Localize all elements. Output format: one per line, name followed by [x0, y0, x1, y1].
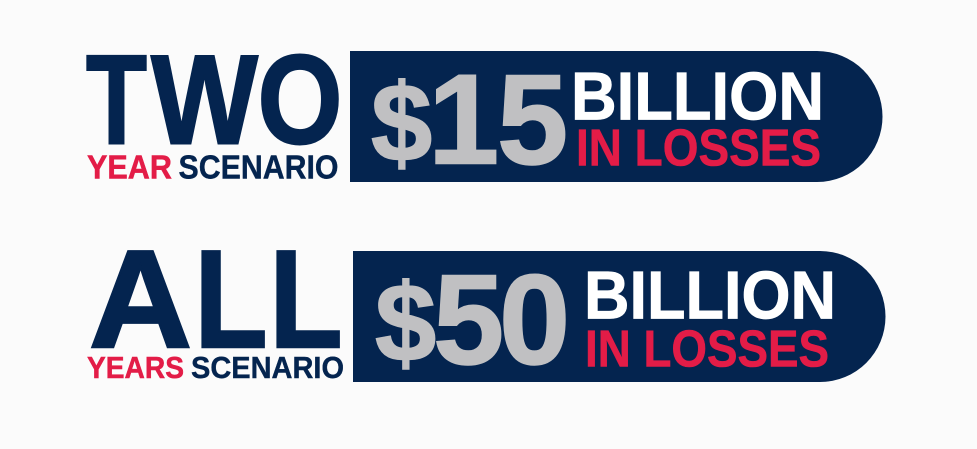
label: YEARS: YEARS: [87, 350, 184, 385]
panel: two year losses: [350, 51, 882, 182]
text: BILLION: BILLION: [571, 58, 824, 134]
amount: $15: [371, 48, 568, 192]
amount: $50: 5: [433, 249, 504, 392]
heading: ALL: A: [89, 222, 192, 377]
scenario row: all years: [87, 222, 886, 392]
panel: all years losses: [353, 251, 886, 382]
amount: $15: 1: [428, 48, 499, 192]
label: YEAR: YEAR: [87, 148, 172, 186]
scenario row: two year: [86, 28, 882, 192]
amount: $50: 0: [499, 249, 570, 392]
heading: TWO: T: [86, 28, 147, 170]
label: SCENARIO: SCENARIO: [191, 350, 344, 385]
amount: $50: [375, 249, 570, 392]
amount: $15: $: [371, 62, 432, 185]
text: BILLION: BILLION: [584, 258, 836, 334]
heading: ALL: [89, 222, 342, 377]
text: IN LOSSES: IN LOSSES: [585, 320, 829, 378]
heading: TWO: O: [258, 28, 342, 170]
amount: $50: $: [375, 262, 436, 385]
text: IN LOSSES: IN LOSSES: [576, 120, 821, 178]
amount: $15: 5: [497, 49, 568, 192]
heading: TWO: W: [151, 28, 258, 170]
heading: TWO: [86, 28, 342, 170]
heading: ALL: L: [194, 222, 268, 377]
label: SCENARIO: SCENARIO: [178, 148, 338, 186]
heading: ALL: L: [270, 222, 342, 377]
